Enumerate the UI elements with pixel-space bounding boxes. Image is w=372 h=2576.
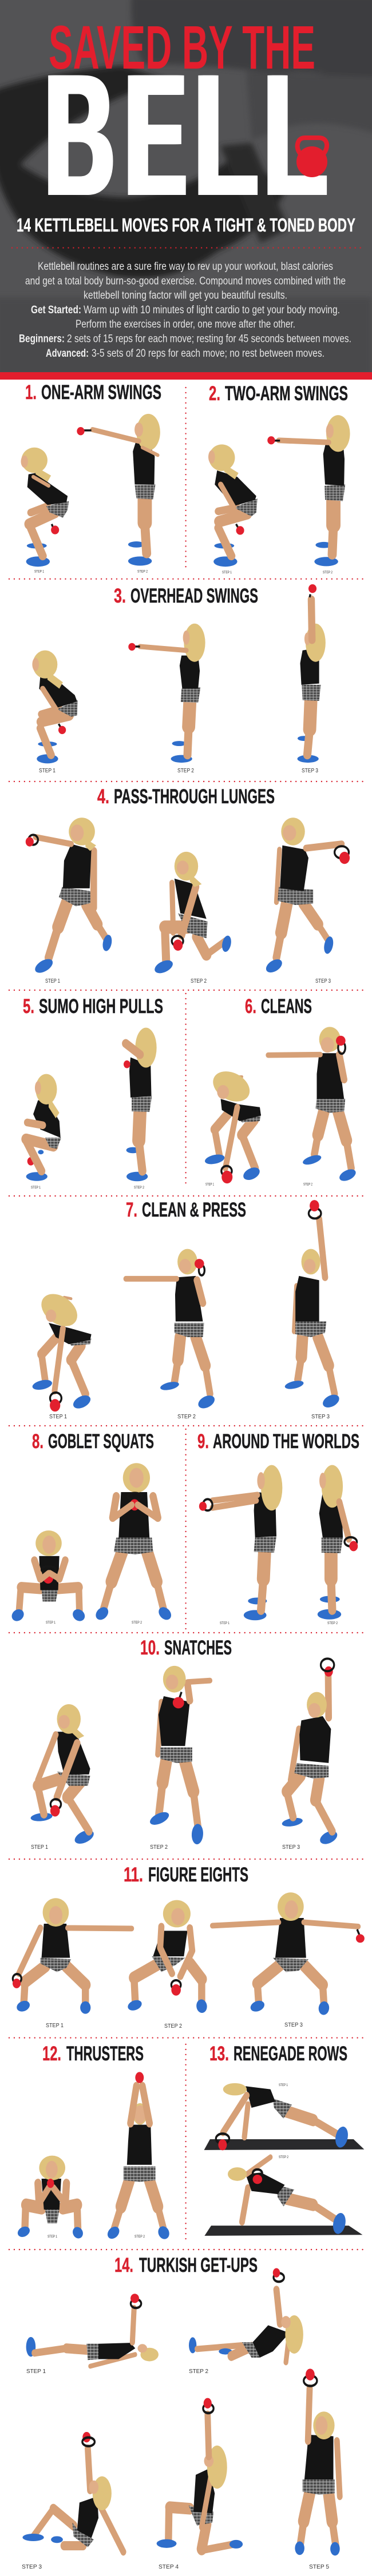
title word BELL: B: [42, 38, 111, 232]
title word BELL: L: [260, 38, 325, 232]
figure: sumo step 2: [124, 1028, 157, 1181]
panel: 3 overhead swings: [32, 584, 326, 774]
figure: get-up step 1: [26, 2294, 159, 2366]
panel: 5 sumo high pulls: [23, 995, 163, 1190]
step labels: [46, 2021, 303, 2029]
intro text: Get Started:: [31, 304, 81, 316]
title word BELL: [42, 38, 327, 232]
figure: renegade step 2 on mat: [204, 2157, 363, 2236]
step labels: STEP 2: [177, 767, 194, 774]
step labels: STEP 2: [189, 2368, 208, 2375]
intro text: Beginners:: [19, 333, 65, 345]
figure: around step 1: [199, 1465, 282, 1620]
step labels: STEP 1: [26, 2368, 46, 2375]
step labels: STEP 1: [31, 1844, 48, 1851]
figure: lunge step 3: [264, 818, 350, 975]
figure: lunge step 2: [153, 852, 232, 976]
heading: one-arm swings: 1.: [25, 381, 37, 404]
step labels: STEP 2: [164, 2023, 182, 2029]
heading: cleans: 6.: [245, 995, 256, 1018]
step labels: STEP 2: [279, 2155, 288, 2159]
figure: eights step 1: [13, 1898, 132, 2016]
panel: 14 turkish get-ups: [22, 2254, 340, 2570]
figure: two-arm step 1: [208, 444, 258, 567]
step labels: STEP 1: [31, 1186, 41, 1190]
step labels: [31, 1844, 300, 1851]
icon: kettlebell: [296, 138, 327, 177]
step labels: STEP 3: [311, 1413, 330, 1420]
heading: cleans: CLEANS: [261, 995, 312, 1018]
figure: sumo step 1: [26, 1074, 61, 1181]
heading: clean and press: 7.: [126, 1199, 137, 1221]
panel: 10 snatches: [30, 1637, 339, 1851]
heading: goblet squats: GOBLET SQUATS: [48, 1430, 154, 1453]
step labels: STEP 4: [159, 2563, 179, 2570]
heading: figure eights: [124, 1864, 248, 1886]
figure: snatches step 2: [149, 1666, 210, 1845]
step labels: [31, 1186, 144, 1190]
heading: sumo high pulls: 5.: [23, 995, 34, 1018]
figure: overhead step 2: [128, 624, 205, 763]
figure: snatches step 1: [30, 1704, 95, 1847]
figure: lunge step 1: [26, 818, 113, 976]
figure: get-up step 2: [189, 2268, 303, 2362]
step labels: STEP 5: [309, 2563, 329, 2570]
heading: goblet squats: 8.: [32, 1430, 43, 1453]
step labels: [22, 2368, 329, 2570]
step labels: [39, 767, 318, 774]
step labels: STEP 1: [222, 571, 232, 575]
title word BELL: L: [191, 38, 256, 232]
header text and icon layer: [11, 13, 361, 360]
step labels: [279, 2083, 288, 2159]
step labels: STEP 2: [150, 1844, 168, 1851]
heading: thrusters: 12.: [42, 2043, 61, 2065]
step labels: [222, 571, 333, 575]
step labels: STEP 2: [177, 1413, 196, 1420]
heading: snatches: 10.: [140, 1637, 160, 1659]
figure: overhead step 1: [32, 651, 78, 763]
step labels: STEP 2: [303, 1182, 312, 1187]
header panel: [0, 0, 372, 380]
figure: cleans step 2: [268, 1027, 357, 1183]
heading: pass-through lunges: PASS-THROUGH LUNGES: [114, 785, 275, 808]
heading: one-arm swings: [25, 381, 161, 404]
panel: 8 goblet squats: [10, 1430, 173, 1625]
heading: figure eights: 11.: [124, 1864, 143, 1886]
figure: cleans step 1: [204, 1066, 261, 1183]
heading: around the worlds: 9.: [197, 1430, 209, 1453]
step labels: STEP 2: [134, 2235, 145, 2239]
figure: goblet step 2: [94, 1463, 173, 1622]
step labels: [48, 2235, 145, 2239]
step labels: [205, 1182, 312, 1187]
heading: turkish get-ups: TURKISH GET-UPS: [139, 2254, 258, 2276]
step labels: [220, 1621, 338, 1625]
heading: sumo high pulls: SUMO HIGH PULLS: [39, 995, 163, 1018]
heading: clean and press: [126, 1199, 246, 1221]
step labels: STEP 2: [191, 978, 207, 984]
figure: get-up step 3: [22, 2432, 124, 2552]
heading: snatches: [140, 1637, 232, 1659]
intro text: [19, 261, 351, 360]
heading: overhead swings: OVERHEAD SWINGS: [130, 585, 258, 607]
header background photo of kettlebell: [0, 0, 372, 380]
step labels: STEP 1: [39, 767, 56, 774]
step labels: STEP 1: [220, 1621, 229, 1625]
panel: 1 one-arm swings: [21, 381, 161, 574]
heading: clean and press: CLEAN & PRESS: [142, 1199, 246, 1221]
title word BELL: E: [121, 38, 182, 232]
figure: renegade step 1 on mat: [204, 2083, 364, 2150]
figure: around step 2: [318, 1465, 358, 1620]
heading: one-arm swings: ONE-ARM SWINGS: [41, 381, 161, 404]
panel: 12 thrusters: [17, 2043, 171, 2242]
step labels: STEP 1: [48, 2235, 57, 2239]
intro text: kettlebell toning factor will get you beautiful results.: [84, 290, 287, 302]
heading: pass-through lunges: 4.: [97, 785, 109, 808]
step labels: STEP 1: [46, 1621, 56, 1625]
intro text: 3-5 sets of 20 reps for each move; no rest between moves.: [92, 348, 324, 360]
figure: clean press step 2: [126, 1249, 216, 1411]
step labels: STEP 1: [279, 2083, 288, 2087]
heading: snatches: SNATCHES: [164, 1637, 232, 1659]
step labels: STEP 2: [137, 569, 148, 574]
panel: 9 around the worlds: [197, 1430, 359, 1625]
panel: 4 pass-through lunges: [26, 785, 350, 984]
figure: one-arm step 2: [77, 414, 160, 565]
step labels: STEP 3: [302, 767, 318, 774]
heading: goblet squats: [32, 1430, 154, 1453]
figure: thrusters step 1: [17, 2156, 84, 2240]
panel: 11 figure eights: [13, 1864, 365, 2029]
panel: 7 clean and press: [31, 1199, 341, 1420]
step labels: STEP 1: [34, 569, 44, 574]
heading: pass-through lunges: [97, 785, 275, 808]
step labels: STEP 2: [134, 1186, 144, 1190]
panel: 6 cleans: [204, 995, 357, 1187]
step labels: STEP 3: [284, 2021, 303, 2028]
figure: get-up step 4: [157, 2398, 243, 2550]
heading: cleans: [245, 995, 312, 1018]
heading: two-arm swings: 2.: [209, 382, 220, 405]
figure: thrusters step 2: [106, 2072, 171, 2242]
step labels: STEP 1: [49, 1413, 67, 1420]
heading: figure eights: FIGURE EIGHTS: [148, 1864, 248, 1886]
figure: eights step 3: [212, 1892, 365, 2017]
heading: renegade rows: 13.: [209, 2043, 229, 2065]
figure: snatches step 3: [282, 1658, 339, 1847]
step labels: [49, 1413, 330, 1420]
step labels: STEP 3: [282, 1844, 300, 1851]
figure: goblet step 1: [10, 1530, 86, 1623]
step labels: STEP 1: [205, 1182, 214, 1187]
figure: get-up step 5: [295, 2368, 340, 2555]
heading: thrusters: [42, 2043, 144, 2065]
panel: 2 two-arm swings: [208, 382, 350, 575]
heading: overhead swings: 3.: [114, 585, 126, 607]
panel: 13 renegade rows: [204, 2043, 364, 2236]
figure: clean press step 1: [31, 1287, 92, 1411]
figure: clean press step 3: [284, 1200, 341, 1410]
heading: overhead swings: [114, 585, 258, 607]
step labels: STEP 2: [327, 1621, 338, 1625]
heading: turkish get-ups: 14.: [114, 2254, 133, 2276]
heading: turkish get-ups: [114, 2254, 258, 2276]
step labels: STEP 2: [323, 571, 333, 575]
heading: sumo high pulls: [23, 995, 163, 1018]
step labels: [45, 978, 331, 984]
figure: two-arm step 2: [267, 415, 350, 566]
figure: one-arm step 1: [21, 448, 69, 567]
heading: thrusters: THRUSTERS: [66, 2043, 144, 2065]
step labels: STEP 3: [22, 2563, 42, 2570]
step labels: STEP 2: [132, 1621, 142, 1625]
figure: eights step 2: [127, 1900, 208, 2015]
intro text: Perform the exercises in order, one move after the other.: [76, 318, 295, 330]
step labels: [46, 1621, 142, 1625]
step labels: STEP 3: [315, 978, 331, 984]
intro text: Advanced:: [46, 348, 89, 360]
step labels: [34, 569, 148, 574]
step labels: STEP 1: [46, 2022, 64, 2029]
figure: overhead step 3: [297, 584, 326, 763]
step labels: STEP 1: [45, 978, 60, 984]
